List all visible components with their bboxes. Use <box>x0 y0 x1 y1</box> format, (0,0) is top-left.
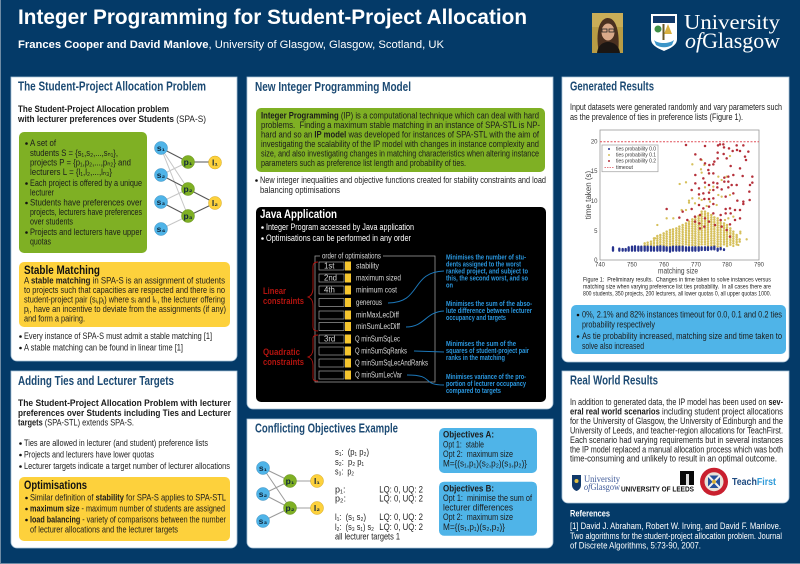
x axis labels: matching size <box>658 266 698 276</box>
graph: students, projects, lecturers: l₁ <box>212 158 218 168</box>
objectives A box: Opt 1: stable <box>443 439 484 449</box>
graph: l₂ <box>314 503 320 513</box>
order of optimisations form: stability <box>356 262 379 270</box>
stable matching box: pⱼ, have an incentive to deviate from the assignments (if any) <box>24 304 226 314</box>
green definition box: over students <box>30 216 73 226</box>
order of optimisations form: minMaxLecDiff <box>356 310 400 320</box>
bullets: Lecturer targets indicate a target number of lecturer allocations <box>24 461 230 471</box>
y axis labels: 10 <box>591 199 598 205</box>
instance preferences: s₂: p₂ p₁ <box>335 457 364 467</box>
java application box: Optimisations can be performed in any order <box>266 233 411 243</box>
blue explanations <box>446 252 532 395</box>
order of optimisations form: 2nd <box>324 274 337 282</box>
green definition box: Students have preferences over <box>30 198 142 208</box>
x axis labels: 740 <box>595 262 606 268</box>
blue explanations: Minimises the sum of the <box>446 339 516 348</box>
green definition box: projects, lecturers have preferences <box>30 207 142 217</box>
bullets: Projects and lecturers have lower quotas <box>24 450 154 460</box>
stable matching box: and form a pairing. <box>24 314 85 324</box>
java application box <box>256 207 546 402</box>
graph: s₃ <box>259 516 267 526</box>
problem definition: with lecturer preferences over Students (SPA-S) <box>17 114 206 124</box>
University of Glasgow logo: ofGlasgow <box>685 28 780 53</box>
SPA-STL definition: preferences over Students including Ties and Lecturer <box>18 408 231 418</box>
panel: conflicting objectives example <box>247 419 553 548</box>
blue explanations: occupancy and targets <box>446 313 506 322</box>
constraint labels: Quadratic <box>263 347 300 358</box>
instance preferences: p₂: <box>335 494 346 504</box>
title: Integer Programming for Student-Project Allocation <box>18 6 527 29</box>
timeout line <box>600 141 759 143</box>
scatter chart <box>584 130 765 276</box>
legend: ties probability 0.0 <box>616 147 656 153</box>
bullets <box>19 438 230 471</box>
y axis labels: 15 <box>591 169 598 175</box>
x axis labels: 780 <box>722 262 733 268</box>
x axis labels <box>595 262 765 276</box>
heading: Generated Results <box>570 80 654 94</box>
objectives B box: Opt 1: minimise the sum of <box>443 493 532 503</box>
legend: timeout <box>616 165 633 171</box>
objectives B box: M={(s₁,p₁)(s₂,p₂)} <box>443 522 505 532</box>
optimisations box: maximum size - maximum number of students are assigned <box>30 504 225 514</box>
graph: s₂ <box>259 489 267 499</box>
order of optimisations form: generous <box>356 298 382 307</box>
graph: p₂ <box>286 503 295 513</box>
constraint labels: constraints <box>263 296 304 307</box>
red braces <box>308 262 318 381</box>
heading: The Student-Project Allocation Problem <box>18 80 206 94</box>
header <box>18 6 781 53</box>
instance preferences: l₂: (s₃ s₁) s₂ <box>335 522 374 532</box>
instance preferences: l₁: (s₁ s₂) <box>335 512 366 522</box>
blue summary box <box>571 305 786 354</box>
logo: TeachFirst: TeachFirst <box>732 477 777 488</box>
references: of Discrete Algorithms, 5:73-90, 2007. <box>570 540 701 550</box>
University of Glasgow logo <box>651 10 781 53</box>
blue explanations: this, the second worst, and so <box>446 274 528 282</box>
integer programming box: investigating the scalability of the IP model with changes in instance complexity and <box>261 139 539 149</box>
photo of author <box>592 13 623 53</box>
bullet: new inequalities: New integer inequalities and objective functions created for stability constraints and load <box>260 175 546 185</box>
graph: students, projects, lecturers: l₂ <box>212 198 218 208</box>
graph: students, projects, lecturers: s₃ <box>157 197 165 207</box>
instance preferences: LQ: 0, UQ: 2 <box>379 522 423 532</box>
y axis labels: time taken (s) <box>584 170 593 219</box>
SPA-STL definition <box>18 398 231 428</box>
problem definition: The Student-Project Allocation problem <box>18 104 169 114</box>
blue explanations: compared to targets <box>446 386 501 395</box>
logo: Edinburgh <box>700 468 728 496</box>
green definition box: students S = {s₁,s₂,...,sₙ₁}, <box>30 148 118 158</box>
order of optimisations form <box>315 252 435 382</box>
graph: l₁ <box>314 476 320 486</box>
order of optimisations form: Q minSumSqLec <box>355 334 400 344</box>
logo: Leeds: UNIVERSITY OF LEEDS <box>621 487 694 494</box>
objectives B box <box>439 482 537 536</box>
integer programming box: parameters such as preference list length and probability of ties. <box>261 158 466 168</box>
SPA-STL definition: The Student-Project Allocation Problem with lecturer <box>18 398 231 408</box>
bullet: new inequalities: balancing optimisations <box>260 185 340 195</box>
problem definition <box>17 104 206 124</box>
objectives B box: lecturer differences <box>443 503 513 513</box>
intro text <box>570 102 782 122</box>
instance preferences: LQ: 0, UQ: 2 <box>379 512 423 522</box>
logo: Glasgow: ofGlasgow <box>584 482 620 493</box>
legend <box>602 145 658 172</box>
y axis labels: 0 <box>594 258 598 264</box>
x axis labels: 770 <box>691 262 702 268</box>
stable matching box: A stable matching in SPA-S is an assignment of students <box>24 276 225 286</box>
heading: Conflicting Objectives Example <box>255 422 398 436</box>
java application box: Integer Program accessed by Java application <box>266 222 414 232</box>
heading: Adding Ties and Lecturer Targets <box>18 374 174 388</box>
instance preferences: p₁: <box>335 484 346 494</box>
graph <box>256 462 324 528</box>
blue points: ties probability 0.0 <box>613 246 724 252</box>
x axis labels: 790 <box>754 262 765 268</box>
instance preferences: s₁: (p₁ p₂) <box>335 447 369 457</box>
optimisations box: of lecturer allocations and the lecturer targets <box>30 525 178 535</box>
constraint labels: Linear <box>263 286 286 297</box>
blue explanations: Minimises the number of stu- <box>446 252 526 262</box>
legend: ties probability 0.1 <box>616 153 656 159</box>
graph: students, projects, lecturers: s₂ <box>157 170 165 180</box>
blue explanations: lute difference between lecturer <box>446 306 532 315</box>
green definition box: quotas <box>30 236 51 246</box>
partner logos <box>572 468 777 496</box>
bullet: new inequalities <box>255 175 546 195</box>
order of optimisations form: 3rd <box>324 334 335 344</box>
references: References <box>570 509 610 519</box>
graph: students, projects, lecturers: p₁ <box>184 157 193 167</box>
order of optimisations form: order of optimisations <box>322 252 381 260</box>
order of optimisations form: 4th <box>324 286 335 294</box>
objectives B box: Opt 2: maximum size <box>443 512 513 522</box>
panel: real world results <box>562 371 789 503</box>
green definition box: Each project is offered by a unique <box>30 178 142 188</box>
blue explanations: ranked project, and subject to <box>446 266 528 276</box>
blue explanations: on <box>446 280 453 290</box>
optimisations box <box>19 477 230 541</box>
green definition box: A set of <box>30 138 56 148</box>
graph: p₁ <box>286 476 295 486</box>
green definition box: lecturer <box>30 188 54 198</box>
graph: students, projects, lecturers: p₂ <box>184 184 193 194</box>
order of optimisations form: Q minSumSqRanks <box>355 346 407 356</box>
panel: adding ties and lecturer targets <box>11 371 237 548</box>
legend: ties probability 0.2 <box>616 159 656 165</box>
yellow points: ties probability 0.1 <box>645 156 747 247</box>
body text <box>570 397 783 464</box>
graph: students, projects, lecturers <box>154 142 222 236</box>
x axis labels: 760 <box>659 262 670 268</box>
order of optimisations form: minSumLecDiff <box>356 322 401 331</box>
red points: ties probability 0.2 <box>667 144 752 237</box>
stable matching facts <box>19 331 212 352</box>
instance preferences: LQ: 0, UQ: 2 <box>379 494 423 504</box>
optimisations box: Optimisations <box>24 480 87 492</box>
panel: the student-project allocation problem <box>11 77 237 361</box>
green definition box: projects P = {p₁,p₂,...,pₙ₂} and <box>30 158 131 168</box>
constraint labels: constraints <box>263 357 304 368</box>
authors: Frances Cooper and David Manlove , University of Glasgow, Glasgow, Scotland, UK <box>18 39 445 51</box>
panel: generated results <box>562 77 789 362</box>
stable matching box: student-project pair (sᵢ,pⱼ) where sᵢ and lₖ, the lecturer offering <box>24 294 225 304</box>
logo: Glasgow: University <box>584 474 620 484</box>
order of optimisations form: Q minSumLecVar <box>355 370 402 380</box>
y axis labels: 5 <box>594 229 598 235</box>
stable matching box <box>19 262 230 327</box>
blue summary box: solve also increased <box>582 341 644 351</box>
order of optimisations form: 1st <box>324 262 335 270</box>
optimisations box: Similar definition of stability for SPA-S applies to SPA-STL <box>30 492 226 502</box>
java application box: Java Application <box>260 209 337 221</box>
integer programming box: problems. Finding a maximum stable matching in an instance of SPA-STL is NP- <box>261 120 540 130</box>
integer programming box: size, and also investigating changes in matching characteristics when altering instance <box>261 148 539 158</box>
order of optimisations form: minimum cost <box>356 286 398 294</box>
blue explanations: Minimises variance of the pro- <box>446 372 526 381</box>
y axis labels <box>584 140 598 264</box>
stable matching box: Stable Matching <box>24 265 100 277</box>
references <box>570 509 782 550</box>
objectives A box: Opt 2: maximum size <box>443 449 513 459</box>
objectives B box: Objectives B: <box>443 484 494 495</box>
objectives A box: Objectives A: <box>443 430 494 441</box>
body text: eral real world scenarios including student project allocations <box>570 406 783 416</box>
figure caption <box>583 277 771 298</box>
heading: Real World Results <box>570 374 658 388</box>
integer programming box: Integer Programming (IP) is a computational technique which can deal with hard <box>261 110 539 120</box>
y axis labels: 20 <box>591 140 598 146</box>
green definition box: lecturers L = {l₁,l₂,...,lₙ₃} <box>30 167 112 177</box>
graph: students, projects, lecturers: p₃ <box>183 211 193 221</box>
green definition box <box>19 132 147 253</box>
constraint labels <box>263 286 304 368</box>
objectives A box: M={(s₁,p₁)(s₂,p₂)(s₃,p₂)} <box>443 459 527 469</box>
stable matching box: to projects such that capacities are respected and there is no <box>24 285 225 295</box>
optimisations box: load balancing - variety of comparisons between the number <box>30 515 226 525</box>
blue explanations: ranks in the matching <box>446 353 505 362</box>
stable matching facts: Every instance of SPA-S must admit a stable matching [1] <box>24 331 212 341</box>
graph: s₁ <box>259 463 268 473</box>
panel: new integer programming model <box>247 77 553 409</box>
heading: New Integer Programming Model <box>255 80 411 94</box>
University of Glasgow logo: University <box>684 10 781 34</box>
objectives A box <box>439 428 537 473</box>
graph: students, projects, lecturers: s₄ <box>157 224 165 234</box>
order of optimisations form: maximum sized <box>356 274 401 282</box>
intro text: as the prevalence of ties in preference lists (Figure 1). <box>570 112 743 122</box>
arrows <box>388 271 444 385</box>
blue explanations: dents assigned to the worst <box>446 260 521 268</box>
instance preferences: LQ: 0, UQ: 2 <box>379 484 423 494</box>
blue explanations: squares of student-project pair <box>446 346 529 355</box>
stable matching facts: A stable matching can be found in linear time [1] <box>24 342 183 352</box>
logo: Leeds <box>621 471 694 494</box>
blue explanations: portion of lecturer occupancy <box>446 379 527 388</box>
blue explanations: Minimises the sum of the abso- <box>446 299 532 308</box>
integer programming box <box>256 108 545 172</box>
graph: students, projects, lecturers: s₁ <box>157 143 166 153</box>
instance preferences <box>335 447 423 541</box>
SPA-STL definition: targets (SPA-STL) extends SPA-S. <box>18 418 134 428</box>
bullets: Ties are allowed in lecturer (and student) preference lists <box>24 438 208 448</box>
instance preferences: s₃: p₂ <box>335 466 354 476</box>
integer programming box: hard and so an IP model was developed for instances of SPA-STL with the aim of <box>261 130 539 140</box>
x axis labels: 750 <box>627 262 638 268</box>
logo: Glasgow <box>572 474 620 493</box>
blue summary box: probability respectively <box>582 319 655 329</box>
instance preferences: all lecturer targets 1 <box>335 531 400 541</box>
green definition box: Projects and lecturers have upper <box>30 227 142 237</box>
order of optimisations form: Q minSumSqLecAndRanks <box>355 358 428 368</box>
